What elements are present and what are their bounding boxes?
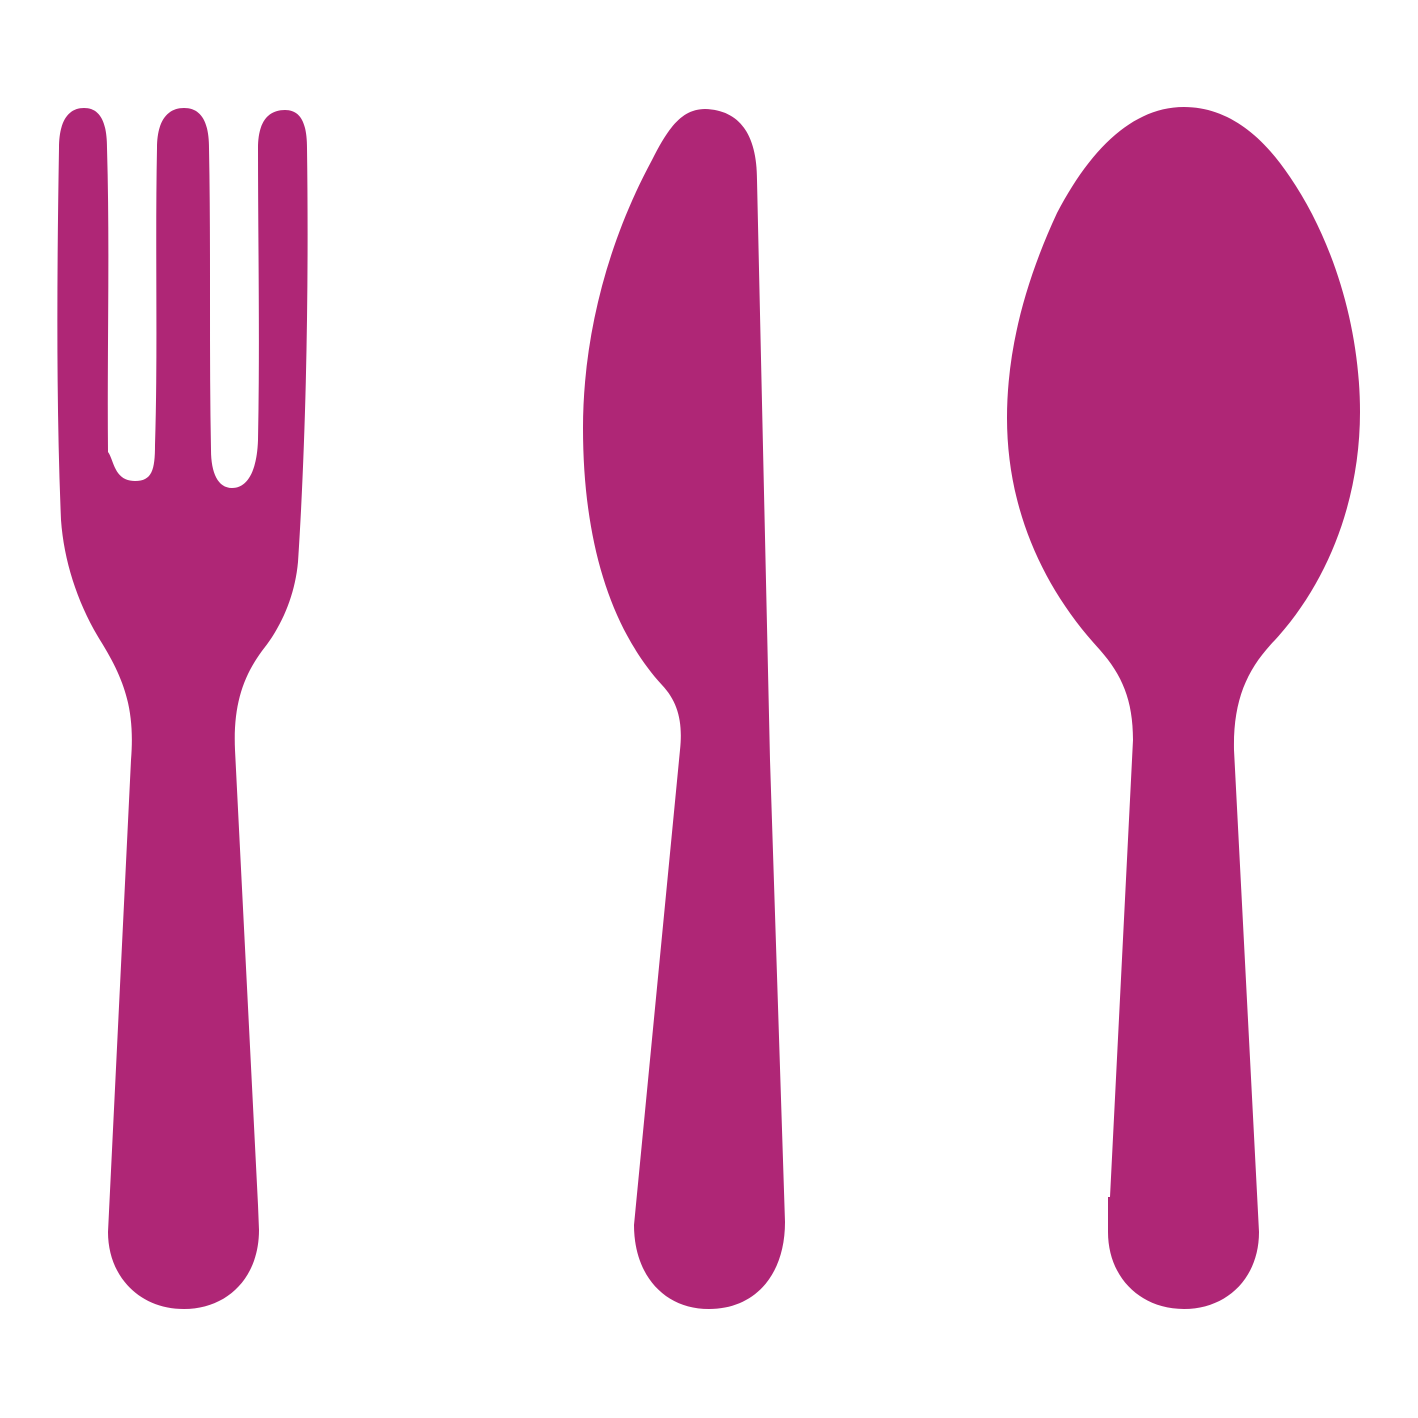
- icon: fork: [57, 108, 308, 1309]
- icon: spoon: [1007, 107, 1360, 1309]
- icon: knife: [583, 109, 785, 1309]
